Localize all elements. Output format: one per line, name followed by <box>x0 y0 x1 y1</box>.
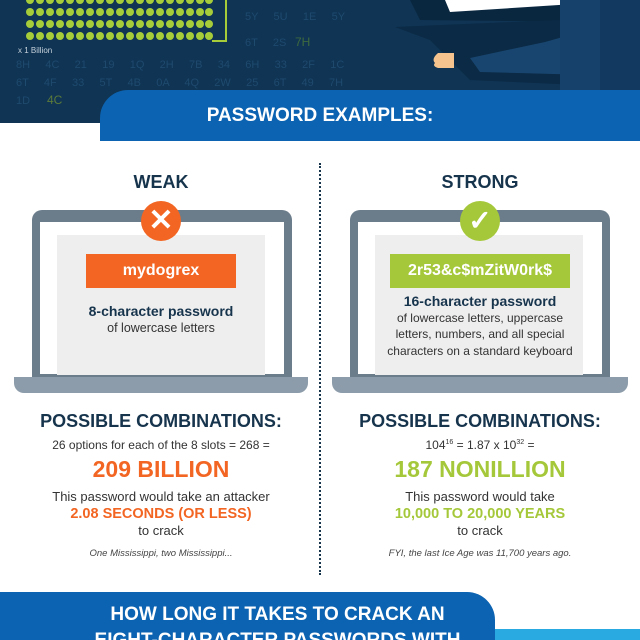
combinations weak: 209 BILLION <box>93 456 229 482</box>
combinations strong: 10,000 TO 20,000 YEARS <box>395 506 565 522</box>
combinations weak: to crack <box>138 523 184 538</box>
dot grid <box>26 0 213 40</box>
combinations weak: POSSIBLE COMBINATIONS: <box>40 411 282 431</box>
combinations strong: 10416 = 1.87 x 1032 = <box>425 438 534 452</box>
combinations weak: 2.08 SECONDS (OR LESS) <box>70 506 252 522</box>
description: letters, numbers, and all special <box>396 327 564 341</box>
heading weak: WEAK <box>134 172 188 192</box>
divider dotted <box>319 163 321 575</box>
description: 16-character password <box>404 293 556 309</box>
laptop weak <box>14 210 308 393</box>
combinations weak: 26 options for each of the 8 slots = 268 = <box>52 438 270 452</box>
panel: weak <box>14 172 308 559</box>
icon: check: ✓ <box>468 205 492 236</box>
combinations weak <box>40 411 282 559</box>
description <box>387 293 573 358</box>
monitor and person <box>395 0 640 123</box>
password bar <box>390 254 570 288</box>
icon: x: ✕ <box>148 204 174 237</box>
banner: password examples: PASSWORD EXAMPLES: <box>207 105 433 126</box>
header dark section <box>0 0 640 123</box>
faint hex codes: 8H 4C 21 19 1Q 2H 7B 34 6H 33 2F 1C <box>16 59 344 71</box>
description: of lowercase letters, uppercase <box>397 310 563 324</box>
icon: x <box>141 201 181 241</box>
faint hex codes <box>16 11 346 107</box>
password bar <box>86 254 236 288</box>
combinations weak: One Mississippi, two Mississippi... <box>89 548 233 559</box>
combinations strong <box>359 411 601 559</box>
laptop strong <box>332 210 628 393</box>
combinations weak: This password would take an attacker <box>52 489 270 504</box>
light blue bar <box>480 629 640 640</box>
icon: check <box>460 201 500 241</box>
combinations strong: 187 NONILLION <box>394 456 566 482</box>
banner: how long it takes <box>0 592 495 640</box>
description <box>89 303 233 335</box>
heading strong: STRONG <box>441 172 518 192</box>
x 1 Billion label: x 1 Billion <box>18 46 52 55</box>
banner: password examples <box>100 90 640 141</box>
faint hex codes: 6T 2S <box>245 37 286 49</box>
header dark section: 4C <box>47 93 63 107</box>
combinations strong: This password would take <box>405 489 555 504</box>
description: of lowercase letters <box>107 321 215 335</box>
password bar: 2r53&c$mZitW0rk$ <box>408 262 552 279</box>
combinations strong: FYI, the last Ice Age was 11,700 years ago. <box>389 548 571 559</box>
faint hex codes: 1D <box>16 95 30 107</box>
panel: strong <box>332 172 628 559</box>
bracket <box>212 0 226 41</box>
description: 8-character password <box>89 303 233 319</box>
header dark section: 7H <box>295 35 310 49</box>
faint hex codes: 6T 4F 33 5T 4B 0A 4Q 2W 25 6T 49 7H <box>16 77 343 89</box>
combinations strong: to crack <box>457 523 503 538</box>
password bar: mydogrex <box>123 262 199 279</box>
description: characters on a standard keyboard <box>387 344 573 358</box>
combinations strong: POSSIBLE COMBINATIONS: <box>359 411 601 431</box>
banner: how long it takes: HOW LONG IT TAKES TO CRACK AN <box>110 604 445 625</box>
faint hex codes: 5Y 5U 1E 5Y <box>245 11 346 23</box>
